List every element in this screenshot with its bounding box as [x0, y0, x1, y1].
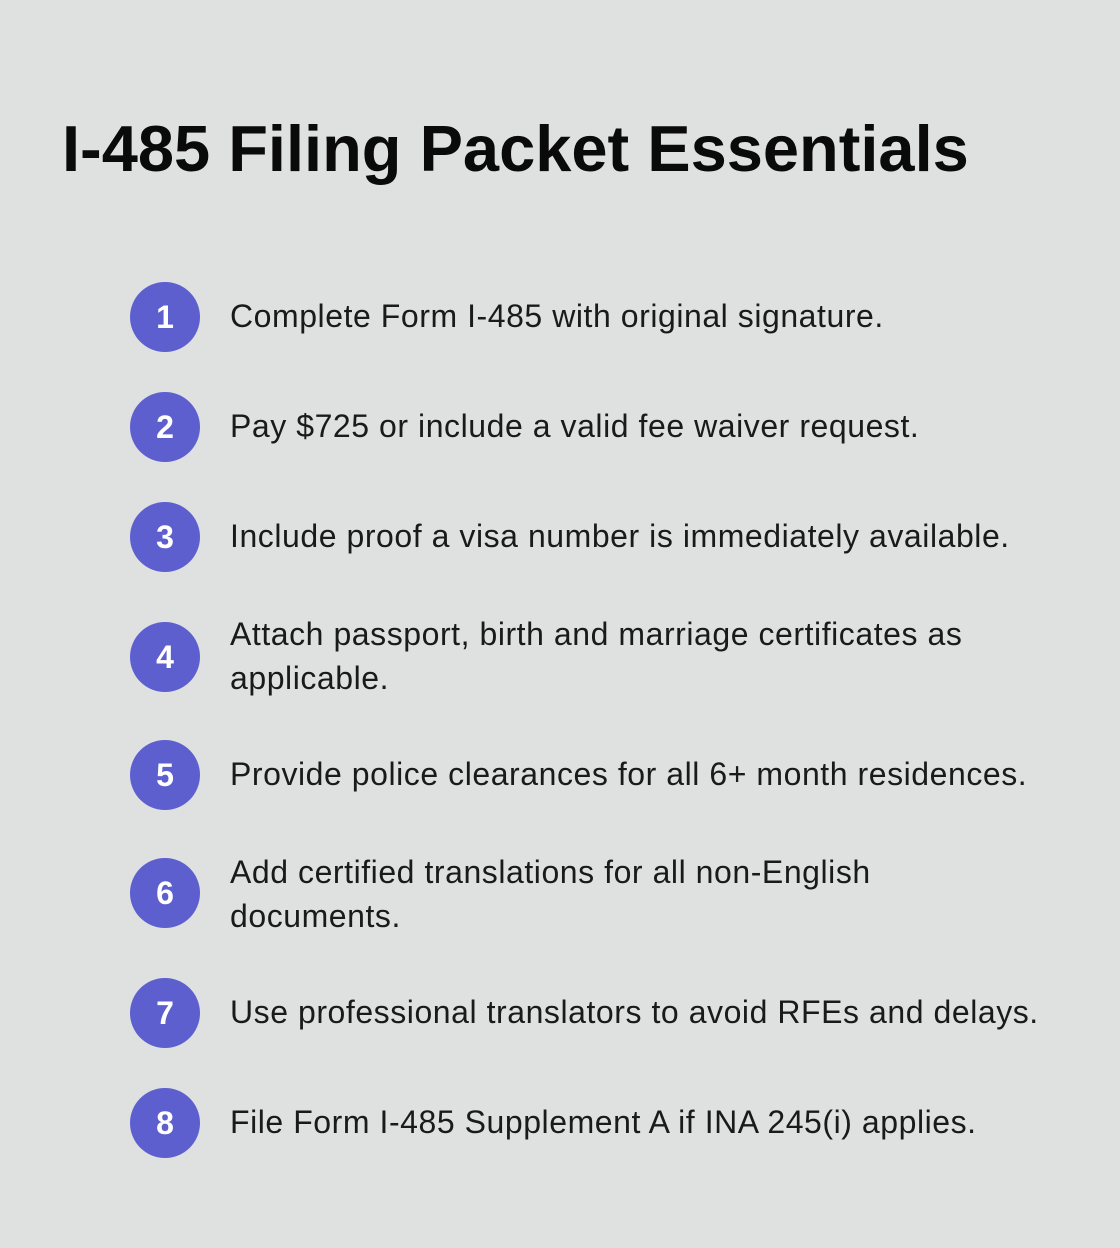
item 7: 7 — [156, 995, 174, 1031]
item 3: Include proof a visa number is immediately available. — [230, 518, 1010, 554]
item 6: documents. — [230, 898, 401, 934]
item 2: Pay $725 or include a valid fee waiver request. — [230, 408, 919, 444]
item 5: Provide police clearances for all 6+ month residences. — [230, 756, 1027, 792]
item 3 — [130, 502, 1010, 572]
item 2 — [130, 392, 919, 462]
item 4: Attach passport, birth and marriage certificates as — [230, 616, 962, 652]
item 2: 2 — [156, 409, 174, 445]
item 7 — [130, 978, 1039, 1048]
item 6 — [130, 854, 871, 934]
item 7: Use professional translators to avoid RFEs and delays. — [230, 994, 1039, 1030]
item 5 — [130, 740, 1027, 810]
item 8: File Form I-485 Supplement A if INA 245(i) applies. — [230, 1104, 977, 1140]
item 8 — [130, 1088, 977, 1158]
item 1: 1 — [156, 299, 174, 335]
item 1 — [130, 282, 884, 352]
item 4: 4 — [156, 639, 174, 675]
item 8: 8 — [156, 1105, 174, 1141]
item 1: Complete Form I-485 with original signature. — [230, 298, 884, 334]
item 3: 3 — [156, 519, 174, 555]
item 6: 6 — [156, 875, 174, 911]
item 5: 5 — [156, 757, 174, 793]
item 4: applicable. — [230, 660, 389, 696]
item 4 — [130, 616, 962, 696]
title: I-485 Filing Packet Essentials — [62, 112, 969, 185]
item 6: Add certified translations for all non-English — [230, 854, 871, 890]
